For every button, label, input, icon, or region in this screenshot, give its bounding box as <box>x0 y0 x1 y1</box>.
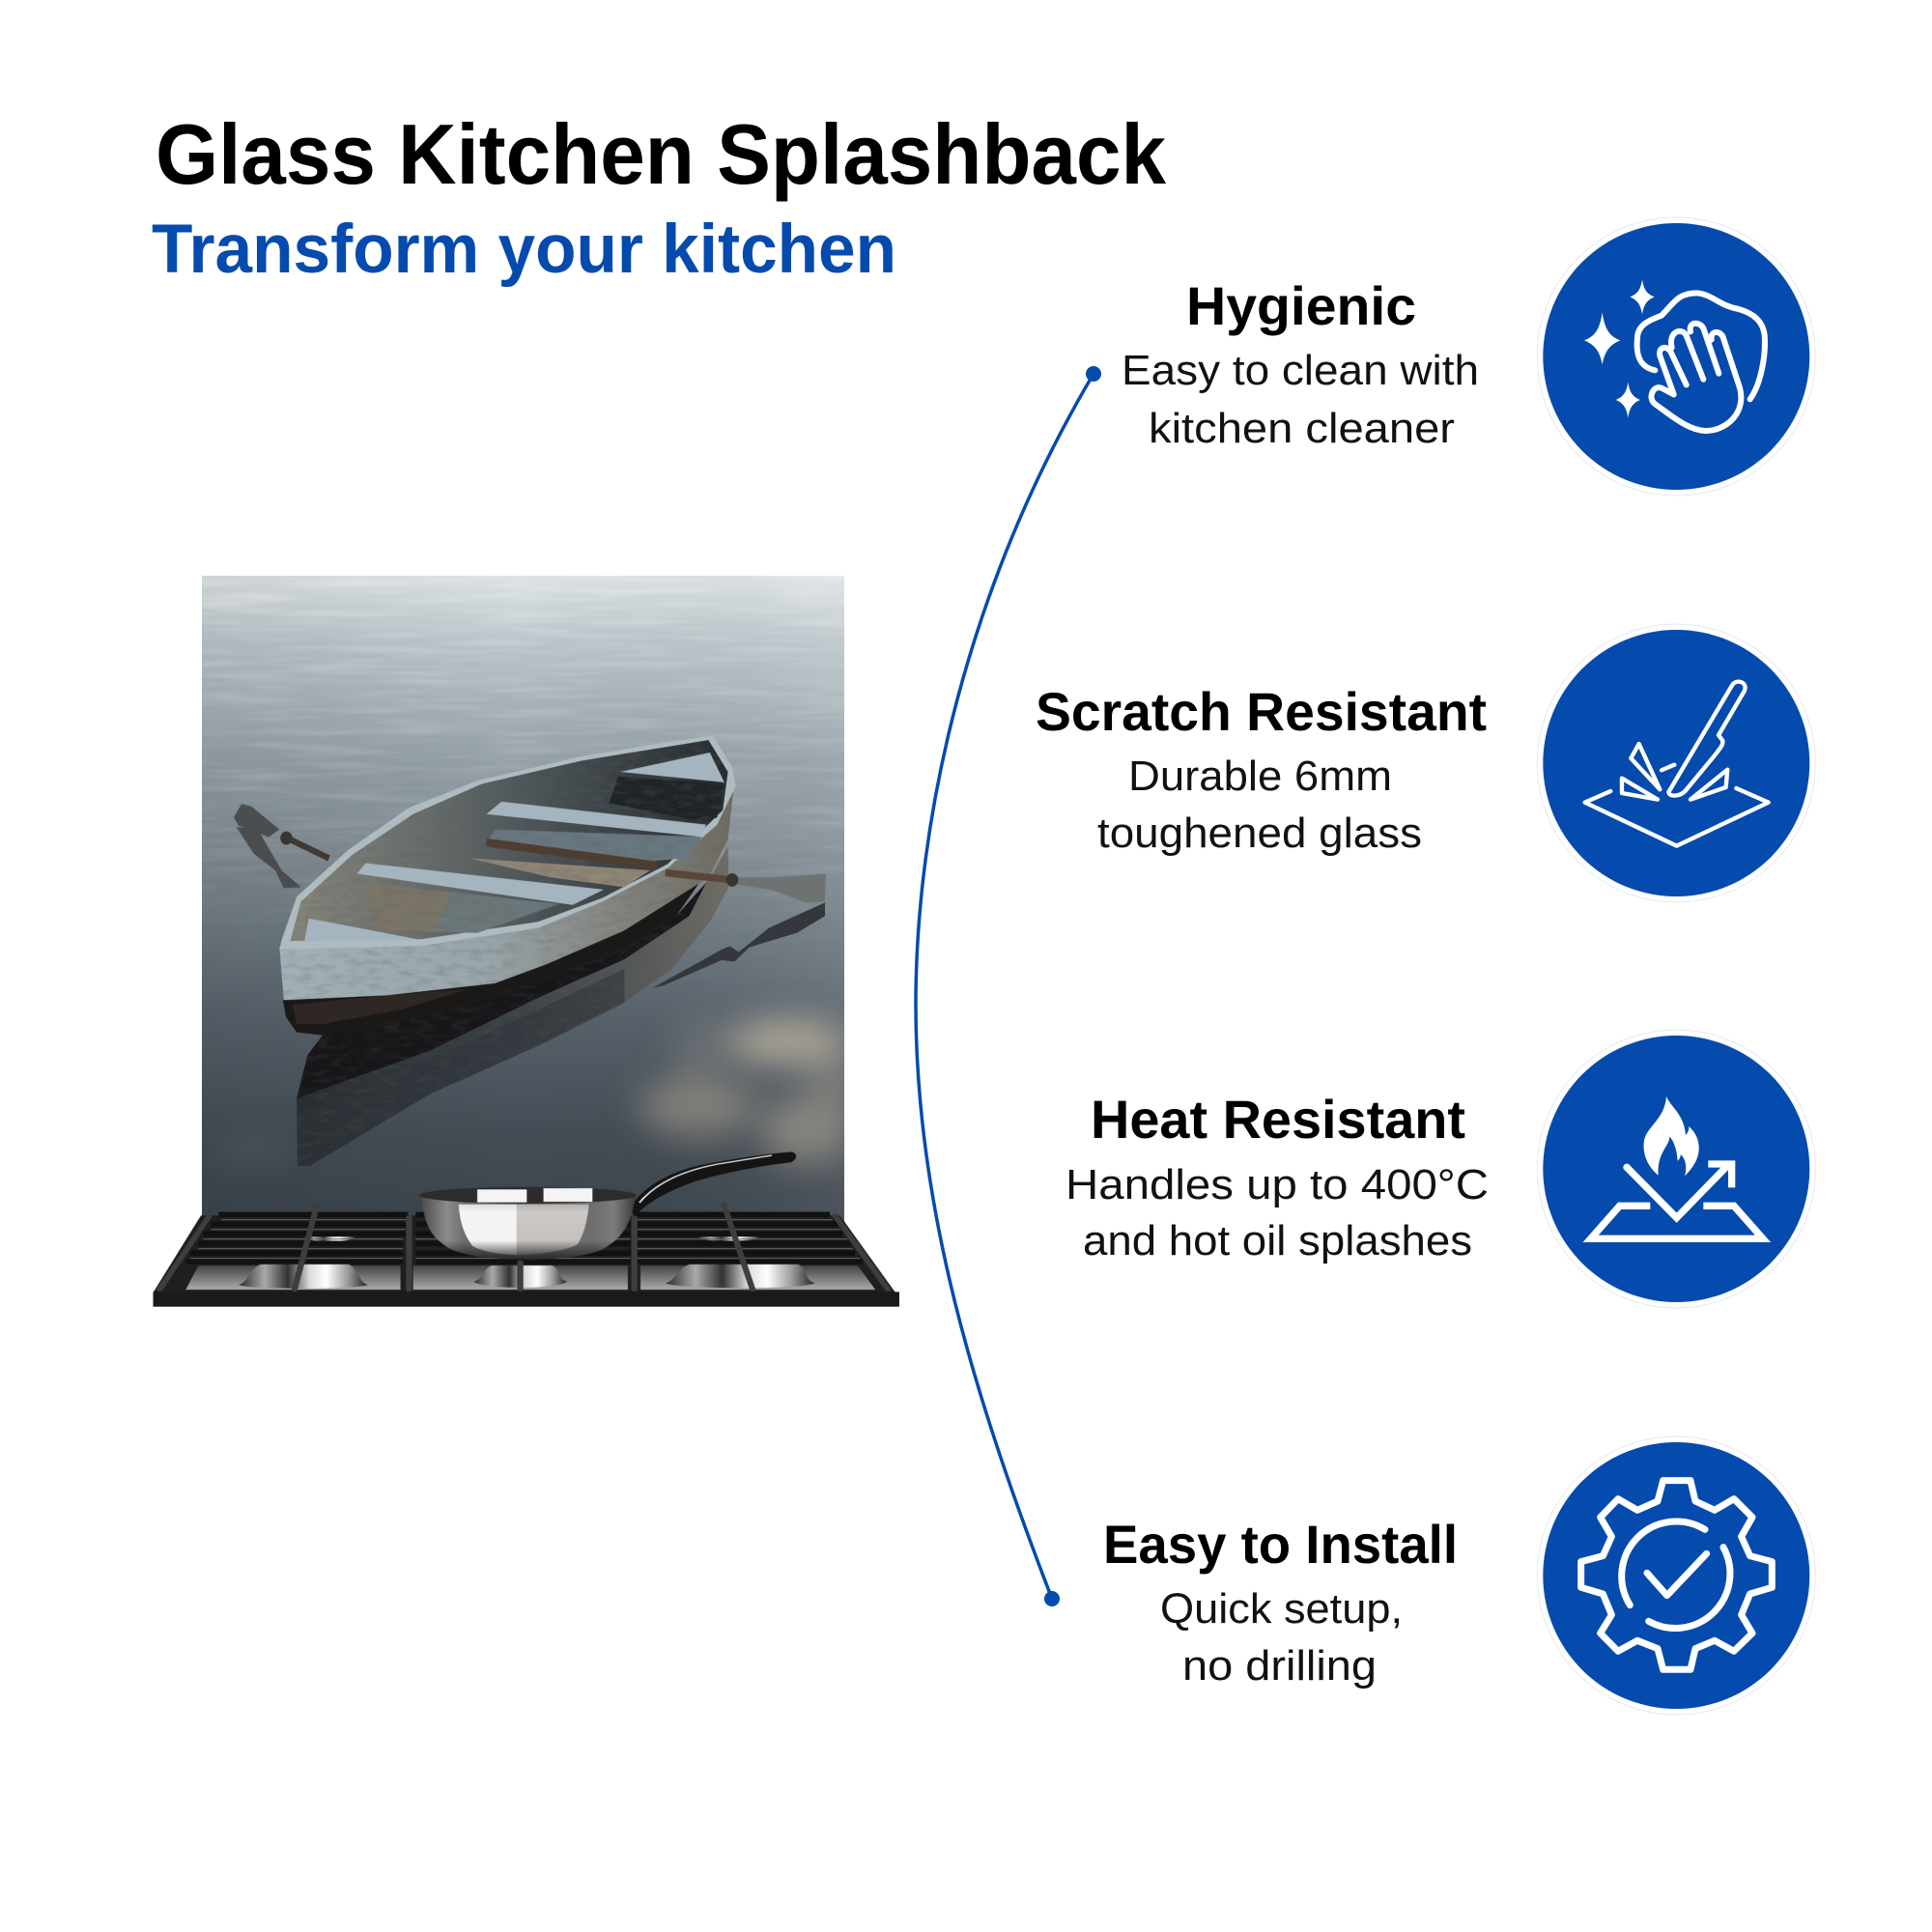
feature: Hygienic text: kitchen cleaner <box>1149 405 1455 452</box>
feature: Heat Resistant text: Heat Resistant <box>1091 1089 1465 1150</box>
feature: Scratch Resistant text: Scratch Resistant <box>1036 681 1487 742</box>
boat floor <box>363 777 724 933</box>
cooktop front strip <box>153 1292 899 1307</box>
icon: hand wiping with sparkles <box>1537 217 1815 496</box>
feature: Hygienic text: Easy to clean with <box>1122 347 1479 394</box>
icon: knife scratching glass <box>1537 624 1815 902</box>
grates <box>185 1214 863 1262</box>
feature: Hygienic text: Hygienic <box>1186 275 1416 336</box>
feature: Scratch Resistant text: Durable 6mm <box>1128 753 1392 800</box>
title: Glass Kitchen Splashback <box>156 106 1167 202</box>
feature: Heat Resistant text <box>1065 1089 1489 1264</box>
boat hull exterior <box>279 781 734 1000</box>
panel: splashback product image <box>153 576 899 1307</box>
pan <box>419 1152 796 1260</box>
infographic canvas <box>153 122 1816 1716</box>
cooktop base <box>153 1215 895 1293</box>
boat reflection <box>237 827 825 1171</box>
feature: Scratch Resistant text: toughened glass <box>1097 810 1422 857</box>
cooktop with pan <box>153 1152 899 1307</box>
oar left <box>234 804 329 858</box>
feature: Easy to Install text <box>1103 1514 1458 1690</box>
boat bottom band <box>283 872 706 1036</box>
cooktop steel windows <box>185 1265 875 1290</box>
feature: Easy to Install text: Easy to Install <box>1103 1514 1458 1575</box>
pan rim <box>419 1187 637 1204</box>
boat rim <box>279 736 736 950</box>
burners <box>239 1233 814 1289</box>
icon: gear with check mark <box>1537 1436 1815 1715</box>
feature: Heat Resistant text: and hot oil splashes <box>1083 1217 1472 1264</box>
subtitle: Transform your kitchen <box>152 212 896 288</box>
pan handle <box>631 1152 796 1217</box>
feature: Easy to Install text: no drilling <box>1182 1642 1377 1690</box>
feature: Heat Resistant text: Handles up to 400°C <box>1065 1161 1489 1208</box>
oar right <box>487 842 826 902</box>
pan body <box>421 1197 636 1260</box>
feature: Easy to Install text: Quick setup, <box>1160 1585 1403 1633</box>
boat interior <box>290 740 728 941</box>
feature: Hygienic text <box>1122 275 1479 452</box>
rowing boat <box>234 736 826 1171</box>
splashback water background <box>202 576 858 1223</box>
icon: flame on heat resistant surface <box>1537 1030 1815 1308</box>
connector curve <box>916 366 1101 1606</box>
boat rust marks <box>293 989 469 1024</box>
boat seats <box>304 753 724 941</box>
feature: Scratch Resistant text <box>1036 681 1487 857</box>
